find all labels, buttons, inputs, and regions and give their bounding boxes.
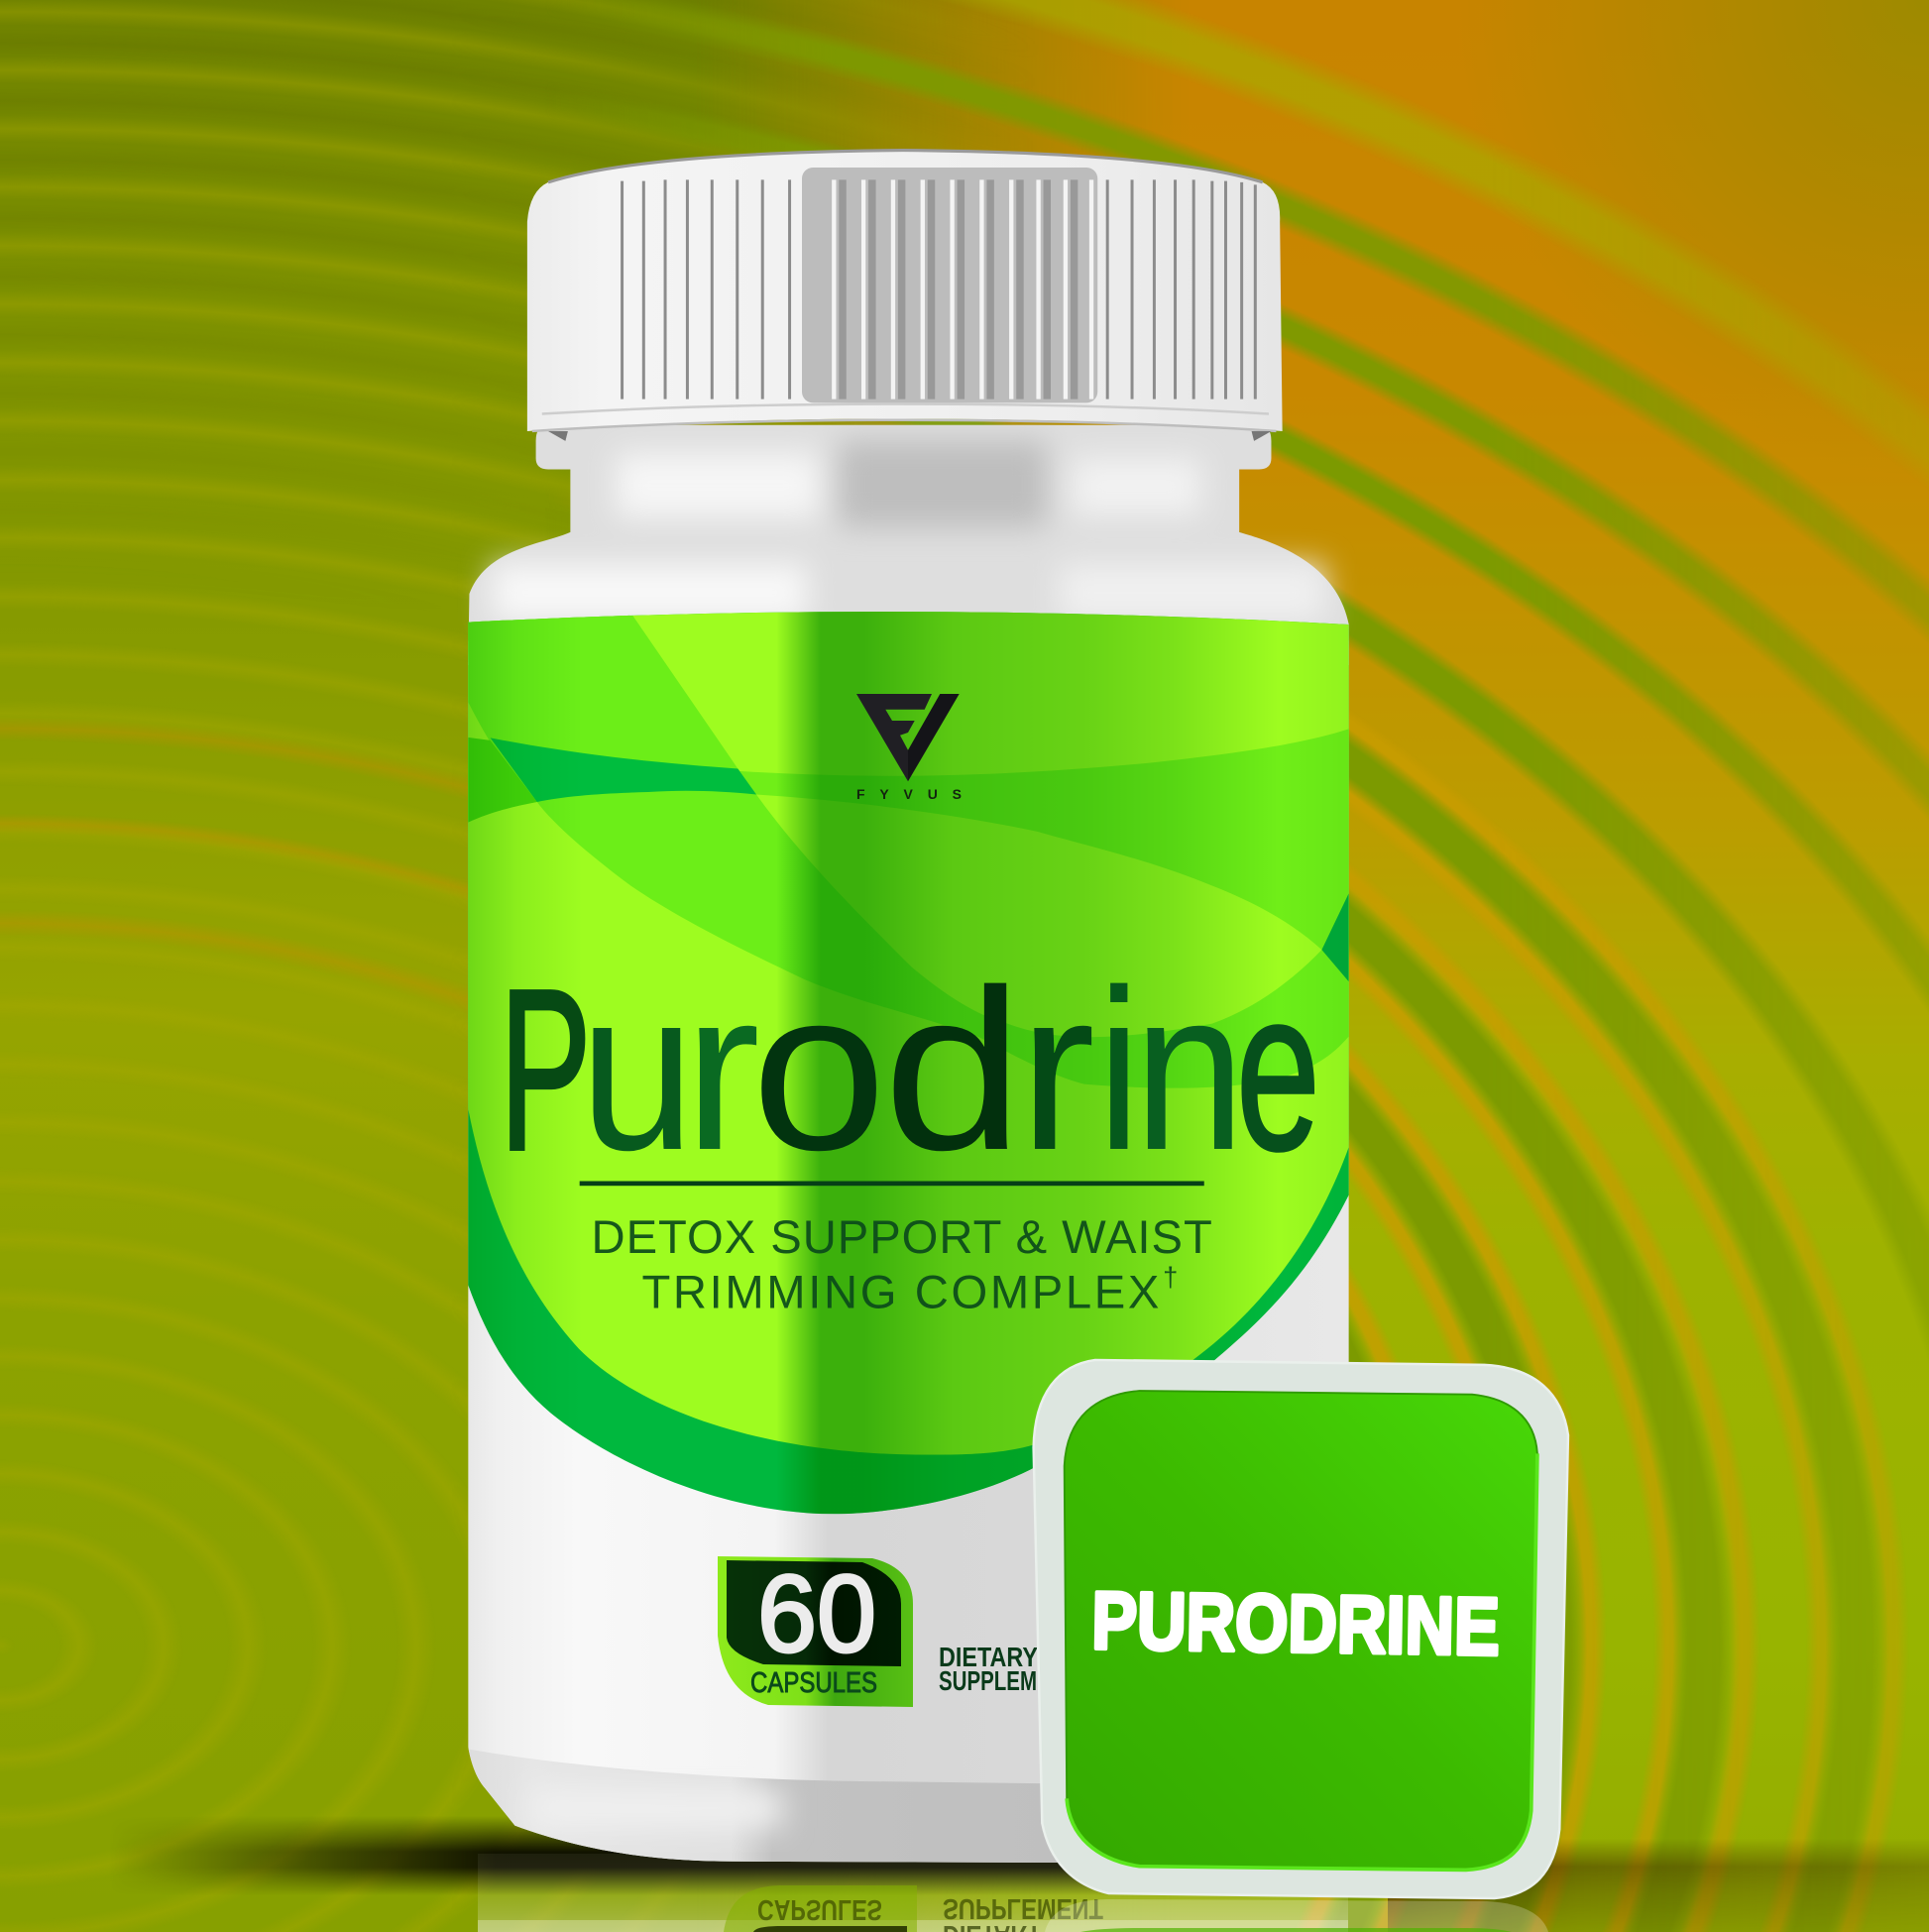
title: Purodrine: o	[751, 942, 886, 1197]
tagline: DETOX SUPPORT & WAIST	[591, 1211, 1212, 1264]
bottle reflection: CAPSULES	[757, 1893, 882, 1925]
brand logo: FYVUS	[856, 786, 962, 802]
bottle cap	[527, 151, 1283, 441]
title: Purodrine	[500, 942, 1320, 1197]
purodrine box	[1034, 1360, 1568, 1898]
brand logo	[856, 694, 962, 802]
tagline: †	[1163, 1261, 1178, 1292]
tagline: TRIMMING COMPLEX	[641, 1267, 1159, 1319]
60 capsules badge: 60	[757, 1553, 876, 1675]
title: Purodrine: d	[883, 942, 1023, 1197]
title: Purodrine: P	[500, 942, 591, 1197]
dietary supplement text: DIETARY	[939, 1642, 1038, 1672]
cap side ribs	[623, 179, 1255, 399]
cap centre shaded ribs	[802, 168, 1097, 402]
title: Purodrine: n	[1134, 942, 1245, 1197]
dietary supplement text	[939, 1642, 1078, 1696]
box green face	[1065, 1391, 1537, 1870]
label	[462, 591, 1355, 1528]
bottle neck and shoulder	[468, 425, 1349, 665]
title: Purodrine: r	[1019, 942, 1095, 1197]
box bottom glossy rim	[1067, 1453, 1537, 1870]
box brand text: PURODRINE	[1091, 1576, 1500, 1672]
title: Purodrine: i	[1097, 942, 1141, 1197]
box reflection	[1045, 1899, 1548, 1932]
bottle	[462, 151, 1355, 1873]
60 capsules badge: CAPSULES	[750, 1667, 877, 1699]
bottle base band	[468, 1749, 1057, 1863]
title: Purodrine: r	[684, 942, 760, 1197]
bottle reflection: SUPPLEMENT	[943, 1892, 1103, 1924]
title: Purodrine: e	[1236, 942, 1320, 1197]
bottle reflection	[478, 1854, 1348, 1932]
divider line	[580, 1182, 1204, 1186]
title: Purodrine: u	[580, 942, 695, 1197]
box frame	[1034, 1360, 1568, 1898]
dietary supplement text: SUPPLEMENT	[939, 1665, 1078, 1696]
tagline	[591, 1211, 1212, 1319]
60 capsules badge	[718, 1553, 913, 1707]
floor shadow	[109, 1816, 1929, 1932]
bottle body	[462, 640, 1355, 1873]
